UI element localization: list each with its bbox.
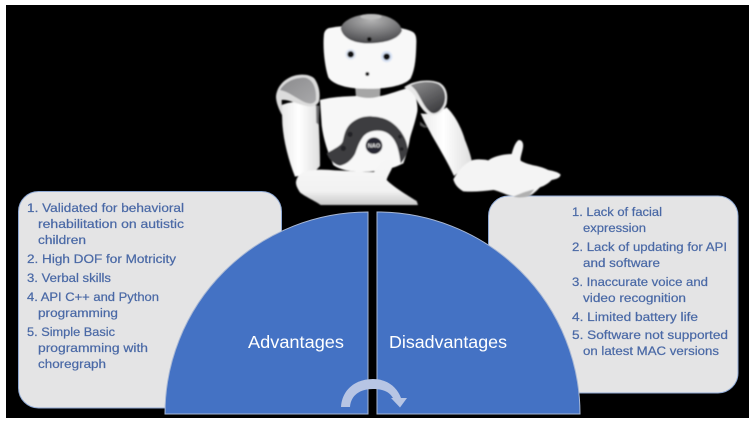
advantages text: choregraph <box>38 357 106 371</box>
disadvantages text: on latest MAC versions <box>583 344 719 358</box>
disadvantages text <box>572 205 728 358</box>
advantages text: 1. Validated for behavioral <box>27 201 184 215</box>
disadvantages text: expression <box>583 221 646 235</box>
advantages text: rehabilitation on autistic <box>38 217 184 231</box>
quarter circle: advantages <box>165 212 368 414</box>
robot right arm <box>420 107 561 198</box>
forehead sensor <box>367 37 372 42</box>
advantages text: 4. API C++ and Python <box>27 290 159 304</box>
heading: Advantages: Advantages <box>248 332 344 352</box>
left forearm and hand <box>296 158 418 205</box>
advantages text: programming with <box>38 341 148 355</box>
advantages text: 2. High DOF for Motricity <box>27 252 177 266</box>
advantages text: children <box>38 233 86 247</box>
robot right shoulder <box>404 80 447 115</box>
head cap <box>341 14 402 43</box>
mouth <box>365 72 369 76</box>
panel: advantages list <box>18 192 282 408</box>
left eye <box>345 49 356 60</box>
advantages text: 5. Simple Basic <box>27 325 115 339</box>
disadvantages text: 4. Limited battery life <box>572 310 698 324</box>
right eye <box>381 51 392 62</box>
robot head <box>324 14 416 89</box>
disadvantages text: 3. Inaccurate voice and <box>572 275 708 289</box>
right elbow dark joint <box>420 122 427 128</box>
disadvantages text: 1. Lack of facial <box>572 205 662 219</box>
robot left arm <box>282 102 418 205</box>
disadvantages text: 5. Software not supported <box>572 328 728 342</box>
robot illustration <box>276 14 561 205</box>
left arm joint strip <box>316 105 319 125</box>
robot torso <box>320 87 417 172</box>
arrow: curved clockwise <box>341 379 407 408</box>
robot logo badge <box>366 137 382 154</box>
advantages text: 3. Verbal skills <box>27 271 111 285</box>
chest buttons <box>341 132 404 151</box>
robot chest plate <box>327 116 408 166</box>
advantages text <box>27 201 184 371</box>
disadvantages text: and software <box>583 256 660 270</box>
right forearm and hand <box>453 140 561 198</box>
robot left shoulder <box>276 75 320 115</box>
panel: disadvantages list <box>488 196 738 393</box>
disadvantages text: video recognition <box>583 291 686 305</box>
advantages text: programming <box>38 306 118 320</box>
robot logo badge: NAO <box>368 144 381 150</box>
quarter circle: disadvantages <box>377 212 580 414</box>
head top sensor ring <box>360 14 382 19</box>
right shoulder cap <box>411 82 445 113</box>
disadvantages text: 2. Lack of updating for API <box>572 240 727 254</box>
heading: Disadvantages: Disadvantages <box>389 332 507 352</box>
robot neck <box>355 85 381 99</box>
right palm shadow <box>513 189 534 198</box>
left shoulder cap <box>280 78 316 104</box>
